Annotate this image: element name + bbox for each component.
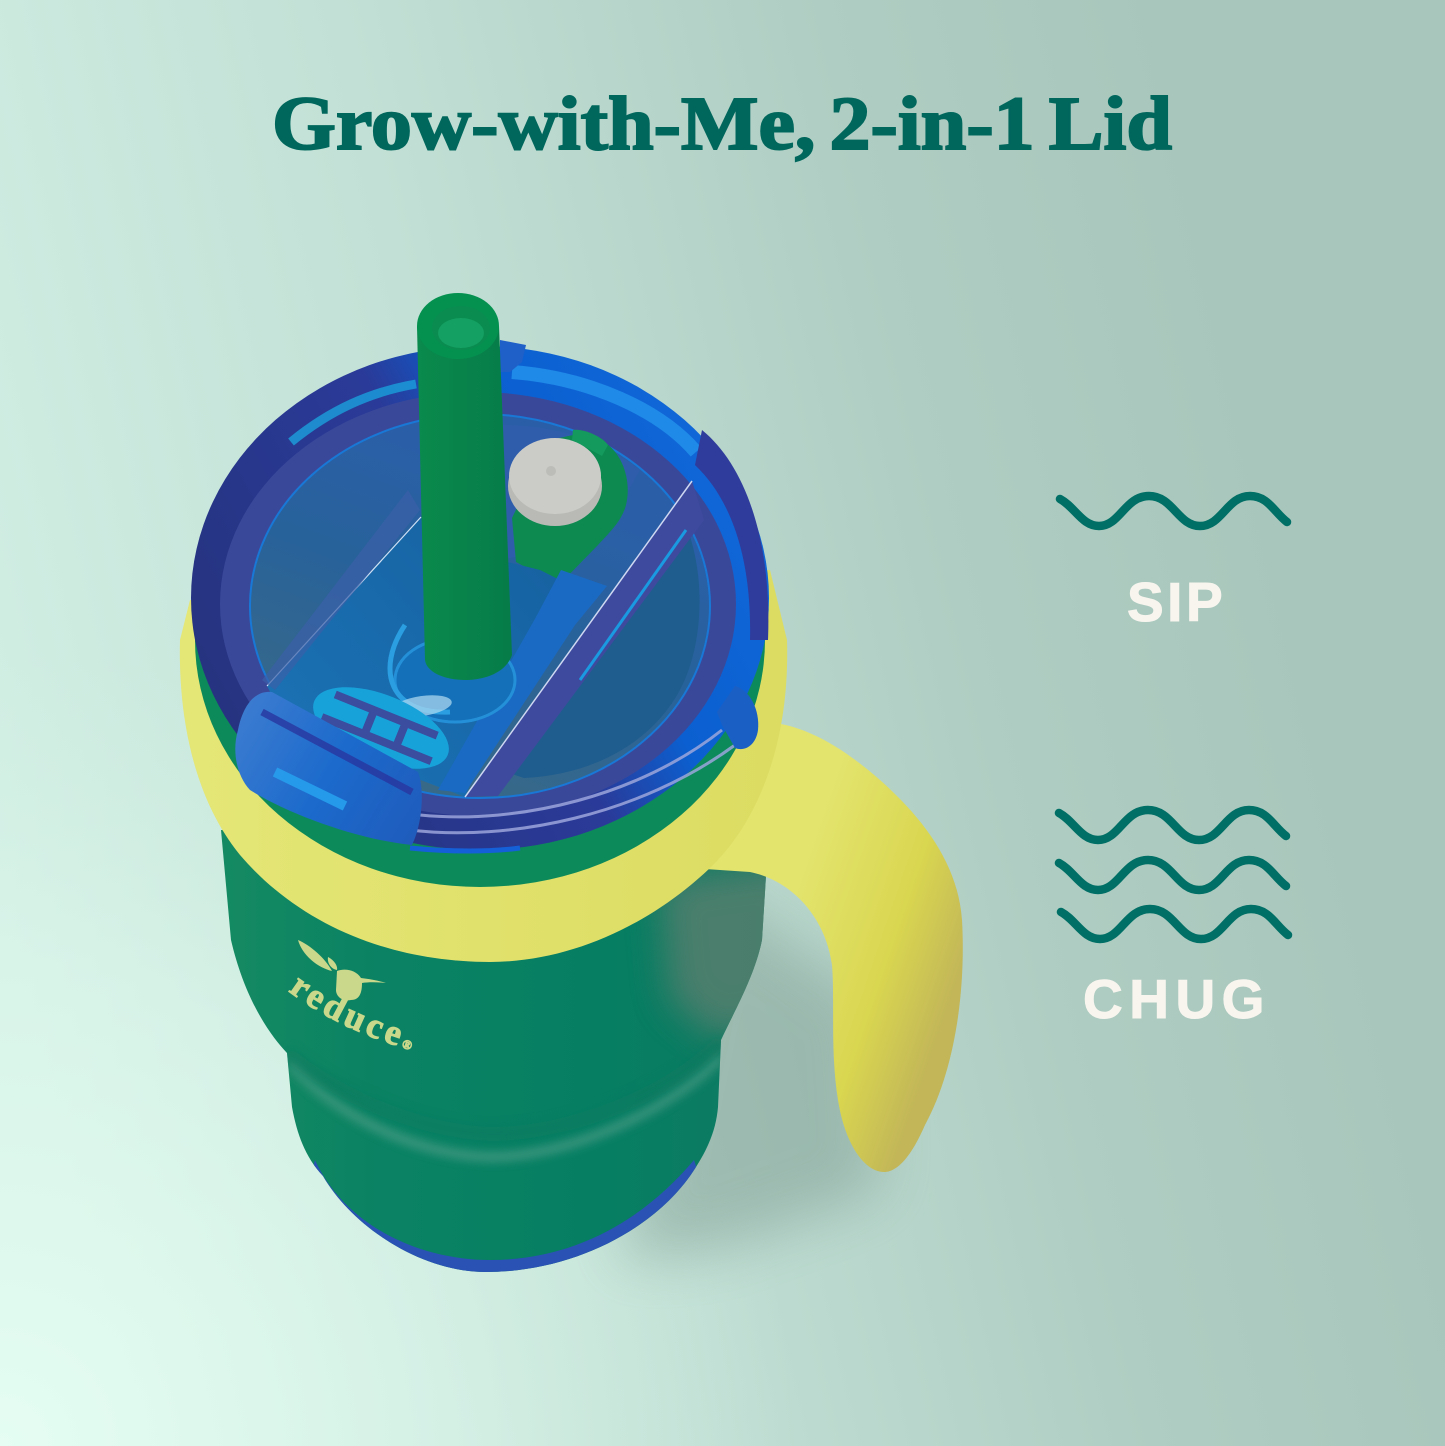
logo badge (302, 670, 460, 786)
right flap divider (465, 481, 704, 797)
sip label: SIP (1127, 571, 1226, 633)
tumbler body (221, 830, 766, 1272)
rim highlight (291, 384, 416, 442)
right half lens (500, 525, 700, 778)
yellow collar ring (180, 570, 787, 962)
green neck under lid (195, 393, 765, 887)
left ridge (262, 490, 420, 690)
chug wave icon (1059, 810, 1288, 939)
sip wave icon (1060, 496, 1287, 526)
hinge knob (717, 686, 758, 749)
chug label: CHUG (1083, 968, 1271, 1030)
cast shadow (620, 880, 880, 1260)
grey stopper (508, 438, 602, 526)
top notch (500, 340, 526, 372)
inner disc (250, 414, 710, 798)
tumbler (180, 293, 963, 1272)
chug indicator (1059, 810, 1288, 1030)
straw (417, 293, 512, 680)
lid front lip (410, 730, 735, 833)
front pull tab (235, 692, 422, 845)
central channel (267, 517, 560, 797)
title: Grow-with-Me, 2-in-1 Lid (272, 82, 1172, 166)
lid outer rim (191, 346, 769, 850)
channel rib (438, 570, 607, 793)
lid (191, 293, 769, 851)
upper blue between straw and stopper (500, 425, 640, 560)
handle (690, 722, 963, 1172)
sip indicator (1060, 496, 1287, 633)
raised right arc (695, 430, 768, 640)
green valve holder (512, 430, 628, 585)
bottom rim accent (410, 848, 520, 851)
lid well (220, 392, 736, 816)
reduce logo on body: reduce® (288, 977, 412, 1050)
straw seat oval (395, 638, 515, 722)
